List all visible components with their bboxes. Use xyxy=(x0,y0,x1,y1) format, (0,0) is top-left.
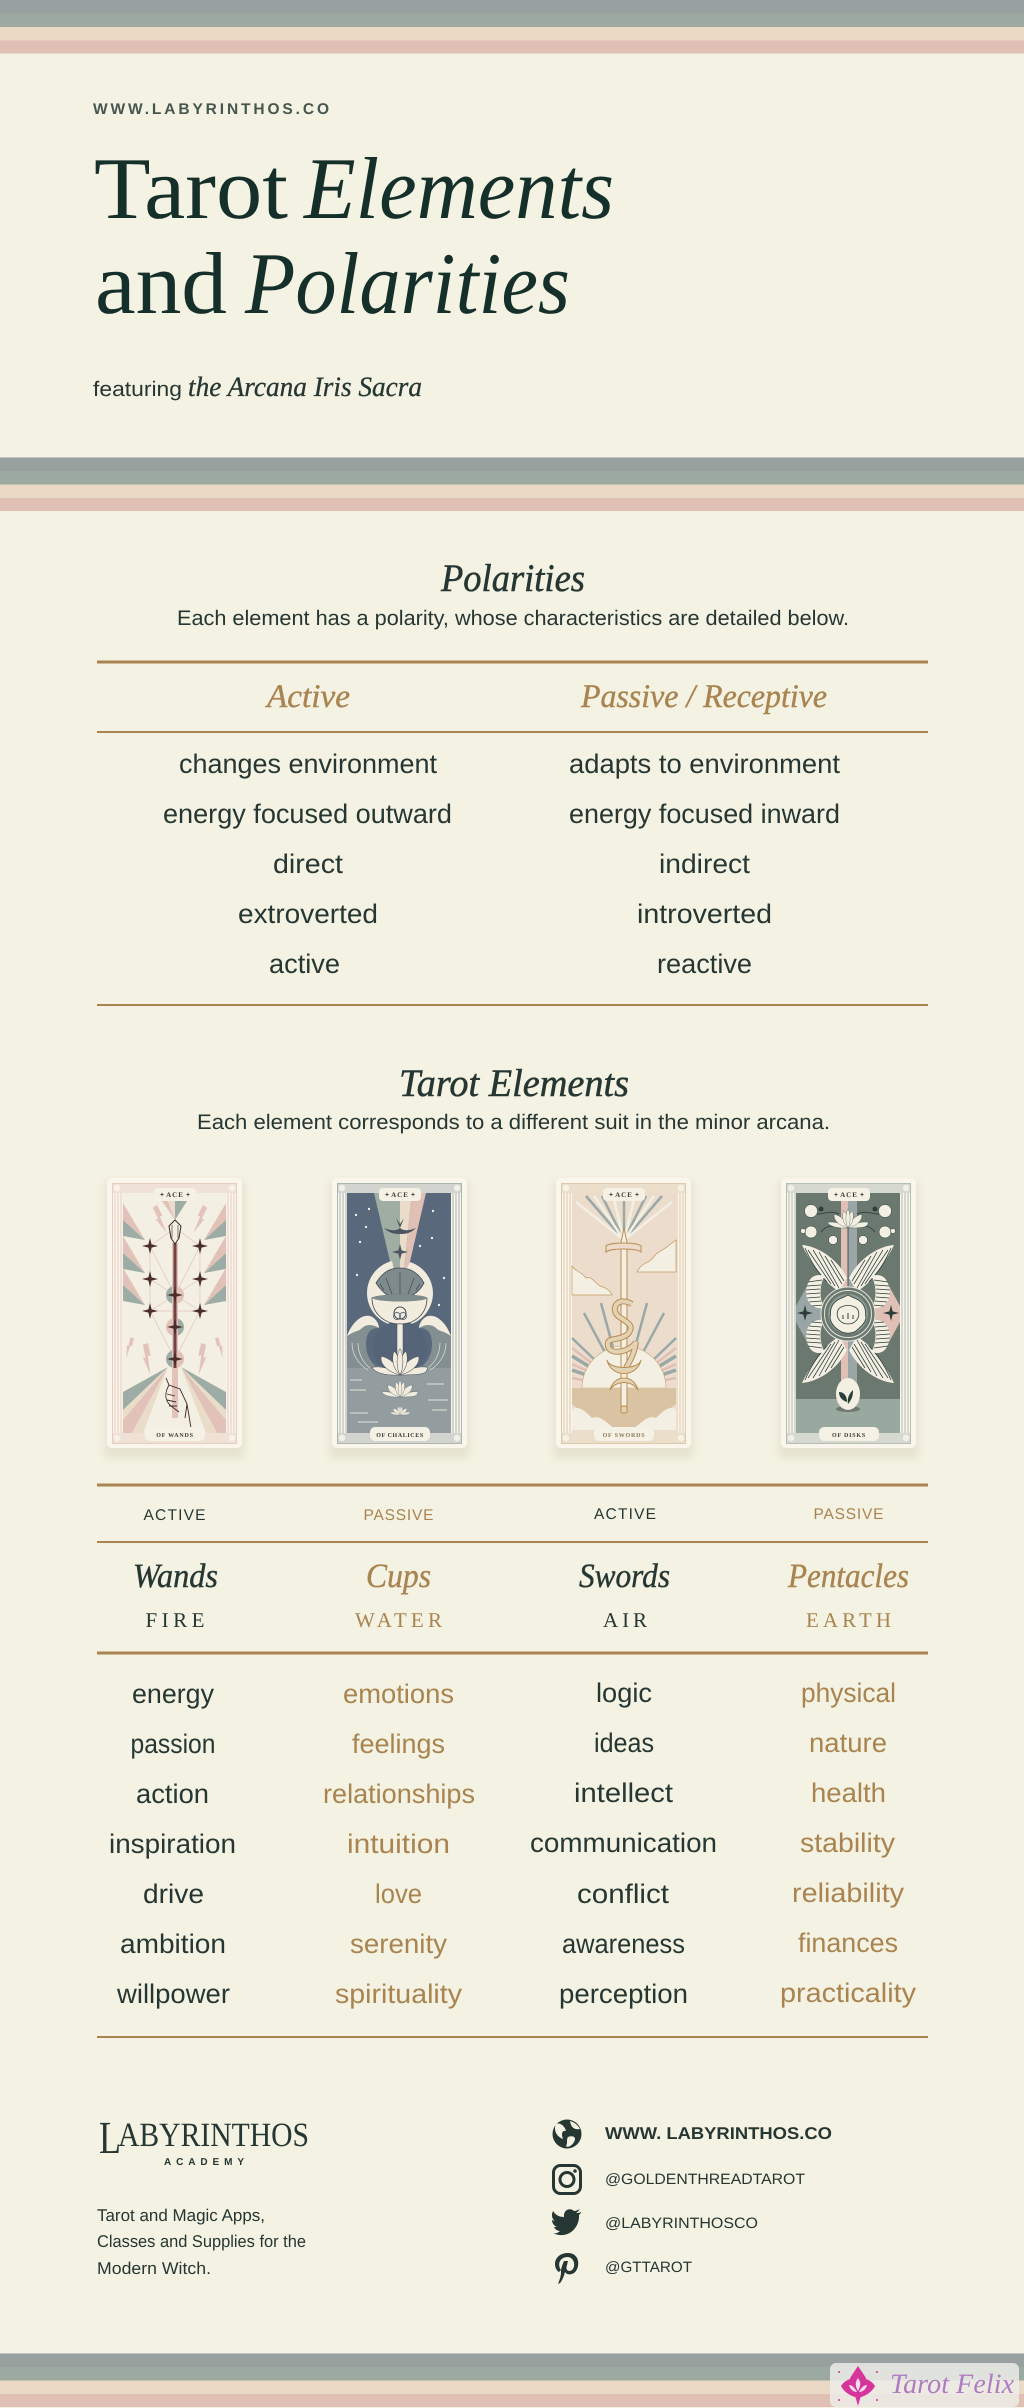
column header: Active: Active xyxy=(265,679,350,715)
column: Cups: WATER xyxy=(355,1608,442,1632)
card: Ace of Wands: ACE xyxy=(166,1191,184,1199)
column: Cups: emotions xyxy=(343,1679,454,1709)
column: Wands: ACTIVE xyxy=(144,1507,206,1524)
active traits: changes environment xyxy=(179,749,437,779)
social links: @GOLDENTHREADTAROT xyxy=(605,2171,805,2188)
column: Wands: ambition xyxy=(120,1929,226,1959)
subtitle xyxy=(93,372,422,403)
active traits: direct xyxy=(273,849,344,879)
column: Pentacles: Pentacles xyxy=(787,1558,909,1595)
column: Pentacles: stability xyxy=(800,1828,896,1858)
column: Wands: FIRE xyxy=(146,1608,204,1632)
column: Cups: serenity xyxy=(350,1929,448,1959)
column: Wands: energy xyxy=(132,1679,214,1709)
logo: Labyrinthos Academy xyxy=(99,2112,309,2168)
active traits xyxy=(163,749,452,979)
column: Cups: love xyxy=(375,1879,422,1909)
column: Pentacles: health xyxy=(811,1778,886,1808)
column: Wands: Wands xyxy=(133,1558,218,1595)
card: Ace of Swords: ACE xyxy=(615,1191,633,1199)
icon: twitter xyxy=(552,2209,581,2235)
column: Pentacles: nature xyxy=(809,1728,887,1758)
tagline: Tarot and Magic Apps, xyxy=(97,2206,265,2225)
card: Ace of Wands xyxy=(104,1178,245,1459)
polarities description: Each element has a polarity, whose characteristics are detailed below. xyxy=(177,607,849,630)
column: Swords xyxy=(530,1506,717,2009)
column: Swords: logic xyxy=(596,1678,652,1708)
column: Pentacles: PASSIVE xyxy=(814,1506,884,1523)
column: Wands: drive xyxy=(143,1879,204,1909)
social links xyxy=(605,2124,832,2276)
active traits: energy focused outward xyxy=(163,799,452,829)
passive traits: introverted xyxy=(637,899,772,929)
subtitle: the Arcana Iris Sacra xyxy=(188,372,422,403)
social links: @GTTAROT xyxy=(605,2259,692,2276)
column: Wands: action xyxy=(136,1779,209,1809)
watermark: Tarot Felix: Tarot Felix xyxy=(890,2369,1015,2400)
card: Ace of Pentacles: OF DISKS xyxy=(832,1433,866,1439)
website eyebrow: WWW.LABYRINTHOS.CO xyxy=(93,101,329,118)
top colour stripes xyxy=(0,0,1024,54)
title xyxy=(94,141,614,333)
watermark: Tarot Felix xyxy=(830,2363,1019,2407)
column: Cups: spirituality xyxy=(335,1979,463,2009)
tagline: Modern Witch. xyxy=(97,2259,211,2278)
column: Swords: intellect xyxy=(574,1778,674,1808)
column: Wands: passion xyxy=(130,1729,216,1759)
social links: WWW. LABYRINTHOS.CO xyxy=(605,2124,832,2143)
column: Cups: feelings xyxy=(352,1729,445,1759)
icon: pinterest xyxy=(555,2253,578,2284)
column: Cups: relationships xyxy=(323,1779,475,1809)
passive traits: reactive xyxy=(657,949,752,979)
column: Pentacles xyxy=(780,1506,917,2008)
title: Polarities xyxy=(244,236,570,333)
column: Swords: ideas xyxy=(594,1728,654,1758)
title: and xyxy=(95,236,227,333)
tagline: Classes and Supplies for the xyxy=(97,2232,306,2251)
subtitle: featuring xyxy=(93,378,182,401)
column: Swords: awareness xyxy=(562,1929,685,1959)
column header: Passive / Receptive: Passive / Receptive xyxy=(580,679,827,715)
card: Ace of Cups: OF CHALICES xyxy=(376,1433,424,1439)
middle colour stripes xyxy=(0,458,1024,511)
column: Pentacles: physical xyxy=(801,1678,896,1708)
card: Ace of Cups: ACE xyxy=(391,1191,409,1199)
column: Swords: perception xyxy=(559,1979,688,2009)
passive traits xyxy=(569,749,840,979)
bottom colour stripes xyxy=(0,2354,1024,2407)
logo: Labyrinthos Academy: ACADEMY xyxy=(164,2157,244,2168)
active traits: extroverted xyxy=(238,899,378,929)
card: Ace of Swords: OF SWORDS xyxy=(603,1433,645,1439)
icon: instagram xyxy=(554,2166,580,2194)
column: Pentacles: reliability xyxy=(792,1878,905,1908)
column: Swords: conflict xyxy=(577,1879,670,1909)
panel: elements table xyxy=(97,1484,928,2038)
social links: @LABYRINTHOSCO xyxy=(605,2215,758,2232)
icon: globe xyxy=(552,2120,582,2148)
card: Ace of Pentacles: ACE xyxy=(840,1191,858,1199)
title: Elements xyxy=(302,141,614,238)
logo: Labyrinthos Academy: ABYRINTHOS xyxy=(118,2117,309,2154)
card: Ace of Cups xyxy=(329,1178,470,1459)
column: Swords: Swords xyxy=(579,1558,670,1595)
column: Pentacles: finances xyxy=(798,1928,898,1958)
panel: polarities table xyxy=(97,660,928,1006)
column: Swords: communication xyxy=(530,1828,717,1858)
column: Cups: Cups xyxy=(366,1558,431,1595)
column: Swords: AIR xyxy=(603,1608,647,1632)
column: Cups: PASSIVE xyxy=(364,1507,434,1524)
column: Wands: inspiration xyxy=(109,1829,236,1859)
tagline xyxy=(97,2206,306,2278)
column: Wands xyxy=(109,1507,236,2009)
heading: Tarot Elements: Tarot Elements xyxy=(399,1062,629,1105)
column: Wands: willpower xyxy=(116,1979,230,2009)
column: Swords: ACTIVE xyxy=(594,1506,656,1523)
elements description: Each element corresponds to a different suit in the minor arcana. xyxy=(197,1111,830,1134)
active traits: active xyxy=(269,949,340,979)
title: Tarot xyxy=(94,141,288,238)
column: Pentacles: practicality xyxy=(780,1978,917,2008)
column: Pentacles: EARTH xyxy=(806,1608,891,1632)
column: Cups: intuition xyxy=(347,1829,450,1859)
passive traits: energy focused inward xyxy=(569,799,840,829)
card: Ace of Swords xyxy=(553,1178,694,1459)
column: Cups xyxy=(323,1507,475,2009)
heading: Polarities: Polarities xyxy=(440,557,585,600)
passive traits: indirect xyxy=(659,849,751,879)
card: Ace of Wands: OF WANDS xyxy=(156,1433,194,1439)
passive traits: adapts to environment xyxy=(569,749,840,779)
logo: Labyrinthos Academy: L xyxy=(99,2112,121,2163)
card: Ace of Pentacles xyxy=(778,1178,919,1459)
